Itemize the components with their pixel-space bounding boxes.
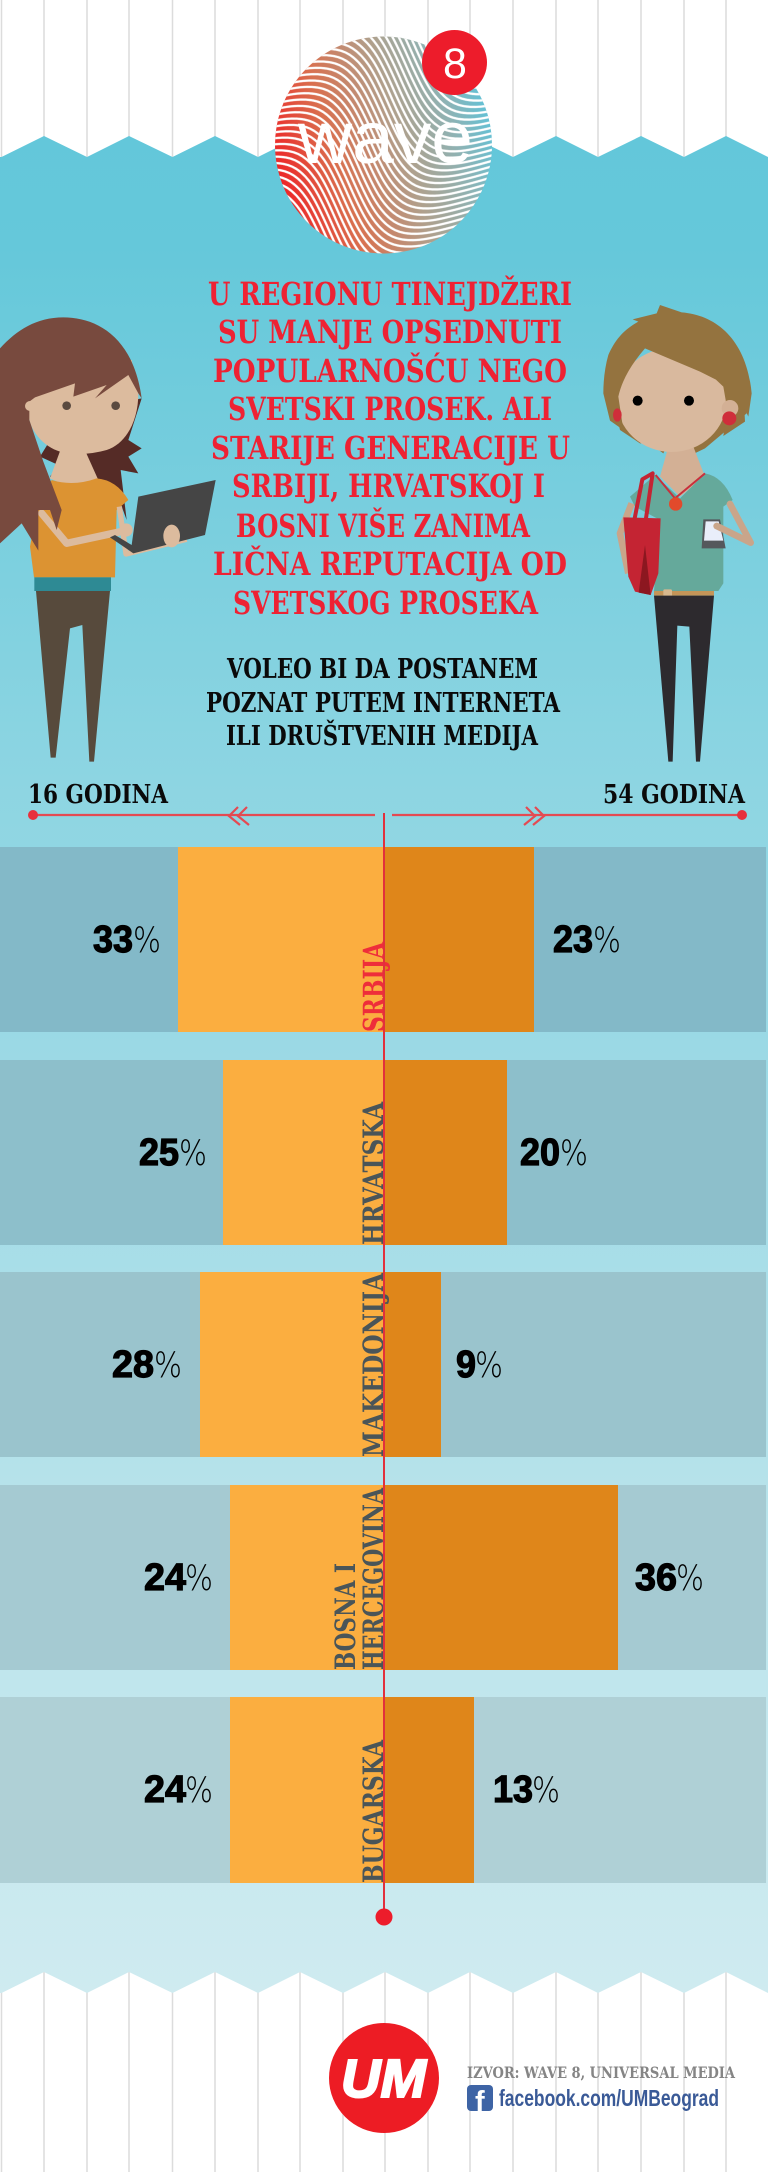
value: 28% bbox=[112, 1344, 182, 1386]
row: Hrvatska bbox=[0, 1060, 766, 1245]
headline: POPULARNOŠĆU NEGO bbox=[213, 352, 567, 390]
country label: HRVATSKA bbox=[357, 1101, 390, 1245]
subheading: survey statement: ILI DRUŠTVENIH MEDIJA bbox=[226, 718, 539, 752]
country label: HERCEGOVINA bbox=[357, 1487, 390, 1670]
value: 24% bbox=[144, 1557, 213, 1599]
axis header: 16 godina, left bbox=[28, 780, 375, 825]
country label: SRBIJA bbox=[357, 942, 391, 1032]
value: 9%: % bbox=[475, 1346, 503, 1386]
value: 23% bbox=[553, 919, 621, 961]
headline: SVETSKI PROSEK. ALI bbox=[228, 391, 552, 428]
value: 13%: 13 bbox=[493, 1769, 533, 1811]
value: 9% bbox=[456, 1344, 503, 1386]
logo wordmark: wave bbox=[297, 96, 473, 179]
axis header: 54 godina, right bbox=[392, 780, 747, 825]
value: 28%: % bbox=[154, 1346, 182, 1386]
value: 36%: % bbox=[676, 1559, 704, 1599]
subheading: survey statement: VOLEO BI DA POSTANEM bbox=[226, 654, 538, 685]
value: 23%: % bbox=[593, 921, 621, 961]
subheading: survey statement bbox=[206, 654, 561, 752]
headline: LIČNA REPUTACIJA OD bbox=[213, 545, 567, 583]
headline: STARIJE GENERACIJE U bbox=[211, 430, 570, 467]
value: 36% bbox=[635, 1557, 704, 1599]
value: 24%: % bbox=[185, 1559, 213, 1599]
illustration: girl with laptop bbox=[0, 317, 216, 762]
value: 20%: % bbox=[560, 1134, 588, 1174]
arrow: pointing left bbox=[28, 807, 375, 825]
value: 24% bbox=[144, 1769, 213, 1811]
row: Makedonija bbox=[0, 1272, 766, 1457]
value: 20% bbox=[520, 1132, 588, 1174]
value: 23%: 23 bbox=[553, 919, 593, 961]
value: 25% bbox=[139, 1132, 207, 1174]
value: 25%: % bbox=[179, 1134, 207, 1174]
value: 13% bbox=[493, 1769, 560, 1811]
value: 24%: % bbox=[185, 1771, 213, 1811]
value: 20%: 20 bbox=[520, 1132, 560, 1174]
value: 33%: 33 bbox=[93, 919, 133, 961]
icon: facebook bbox=[467, 2085, 493, 2118]
headline: SRBIJI, HRVATSKOJ I bbox=[232, 468, 545, 505]
axis header: 16 godina, left: 16 GODINA bbox=[28, 780, 169, 810]
center axis line with end dot bbox=[376, 813, 392, 1926]
subheading: survey statement: POZNAT PUTEM INTERNETA bbox=[206, 688, 561, 719]
country label bbox=[329, 1487, 390, 1670]
arrow: pointing right bbox=[392, 807, 747, 825]
value: 33% bbox=[93, 919, 161, 961]
row: Bosna i Hercegovina bbox=[0, 1485, 766, 1670]
logo: UM: UM bbox=[341, 2049, 427, 2109]
badge: number 8: 8 bbox=[443, 40, 467, 88]
headline: SVETSKOG PROSEKA bbox=[233, 585, 538, 622]
icon: facebook: f bbox=[475, 2086, 485, 2118]
headline: BOSNI VIŠE ZANIMA bbox=[236, 507, 530, 545]
logo: UM bbox=[329, 2023, 439, 2133]
headline: U REGIONU TINEJDŽERI bbox=[208, 275, 572, 313]
country label: BUGARSKA bbox=[357, 1739, 390, 1883]
headline: SU MANJE OPSEDNUTI bbox=[218, 314, 562, 351]
value: 24%: 24 bbox=[144, 1557, 186, 1599]
logo: wave 8 bbox=[275, 30, 492, 254]
value: 9%: 9 bbox=[456, 1344, 476, 1386]
country label: MAKEDONIJA bbox=[357, 1272, 390, 1457]
value: 24%: 24 bbox=[144, 1769, 186, 1811]
value: 33%: % bbox=[133, 921, 161, 961]
axis header: 54 godina, right: 54 GODINA bbox=[603, 780, 746, 810]
country label: BOSNA I bbox=[329, 1563, 362, 1670]
badge: number 8 bbox=[422, 30, 487, 95]
value: 28%: 28 bbox=[112, 1344, 154, 1386]
row: Srbija bbox=[0, 847, 766, 1032]
headline bbox=[208, 275, 572, 622]
row: Bugarska bbox=[0, 1697, 766, 1883]
value: 36%: 36 bbox=[635, 1557, 677, 1599]
illustration: woman with bag and phone bbox=[603, 305, 752, 762]
value: 13%: % bbox=[532, 1771, 560, 1811]
value: 25%: 25 bbox=[139, 1132, 179, 1174]
